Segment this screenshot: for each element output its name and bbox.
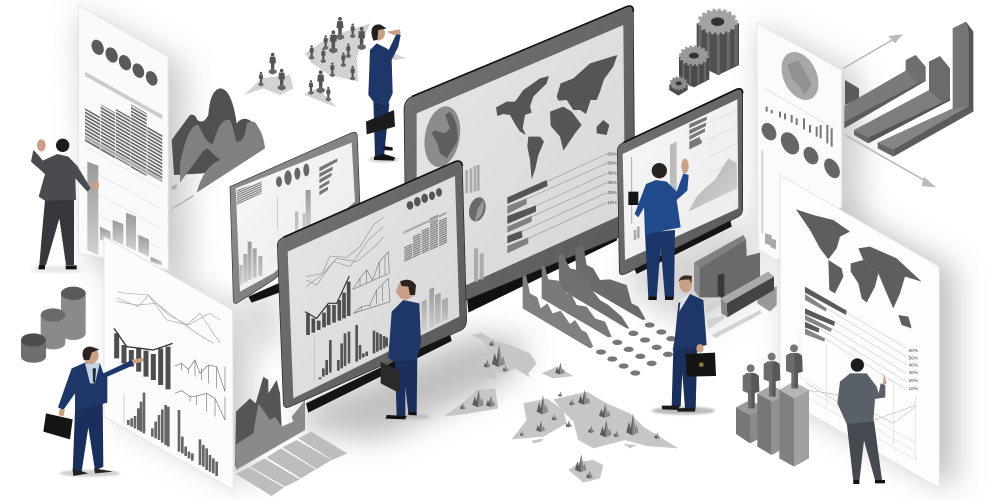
panel: bottom-left mountain and stripes — [235, 377, 347, 496]
percent labels — [909, 348, 918, 391]
icon: gears — [669, 11, 739, 96]
percent labels: 30% — [909, 370, 918, 375]
panel: large monitor with world map — [404, 6, 635, 313]
percent labels: 10% — [607, 200, 617, 205]
arrow: upper grey arrow — [843, 34, 903, 68]
chart: grey mountain areas — [172, 88, 265, 209]
hatched table — [404, 215, 447, 262]
map — [796, 209, 922, 328]
pie row — [89, 38, 160, 88]
person: blue suit facing screen — [381, 280, 430, 419]
outline charts — [353, 252, 390, 313]
percent labels: 20% — [607, 190, 617, 195]
percent labels: 40% — [909, 363, 918, 368]
panel: front monitor with charts — [277, 161, 467, 413]
line chart — [306, 217, 383, 287]
bottom bars — [123, 393, 125, 423]
person: blue suit looking through hand with briefcase — [366, 24, 401, 162]
chart: isometric stepped bars — [844, 22, 973, 157]
percent labels: 60% — [607, 151, 617, 156]
globe — [420, 103, 465, 170]
panel: top network map with people — [244, 17, 407, 107]
table hatches — [85, 104, 162, 182]
percent labels — [607, 151, 617, 205]
percent labels: 50% — [607, 161, 617, 166]
floor world map with spikes — [443, 333, 678, 483]
panel: lower-left paper chart sheet — [104, 237, 233, 490]
icon: cylinders — [21, 287, 86, 363]
world map — [496, 55, 617, 179]
panel: top-left paper chart sheet — [78, 5, 168, 270]
bars — [87, 162, 162, 266]
panel: right monitor with area chart — [617, 89, 743, 275]
bottom bars — [320, 325, 387, 379]
percent labels: 60% — [909, 348, 918, 353]
dark bar chart — [117, 333, 168, 389]
percent labels: 30% — [607, 180, 617, 185]
person: blue suit at right monitor — [628, 159, 689, 300]
line chart — [117, 292, 220, 343]
dot grid on floor — [596, 322, 676, 376]
panel: right upper paper with globe and pies — [757, 23, 843, 260]
panel: right front paper with world map — [780, 175, 939, 488]
pies row — [407, 188, 442, 210]
percent labels: 10% — [909, 386, 918, 391]
chart: floor ridge peaks — [523, 245, 646, 348]
chart: pedestals with figures — [736, 344, 809, 467]
person: blue suit pointing with briefcase — [43, 347, 144, 477]
person: grey suit pointing at map — [837, 358, 887, 484]
grey bars — [422, 287, 448, 331]
dark bars — [308, 282, 349, 335]
percent labels: 50% — [909, 355, 918, 360]
panel: small monitor left — [230, 132, 360, 303]
person: grey suit raising hand — [31, 139, 99, 272]
percent labels: 20% — [909, 378, 918, 383]
pie — [466, 195, 488, 223]
arrow: lower grey arrow — [845, 135, 936, 187]
blocks: middle-right isometric shapes — [694, 235, 777, 338]
percent labels: 40% — [607, 171, 617, 176]
outline charts — [175, 360, 225, 420]
person: blue suit holding briefcase facing viewer — [652, 275, 716, 415]
grid and lines — [800, 333, 916, 460]
bar list — [522, 154, 607, 238]
bars — [819, 308, 907, 390]
